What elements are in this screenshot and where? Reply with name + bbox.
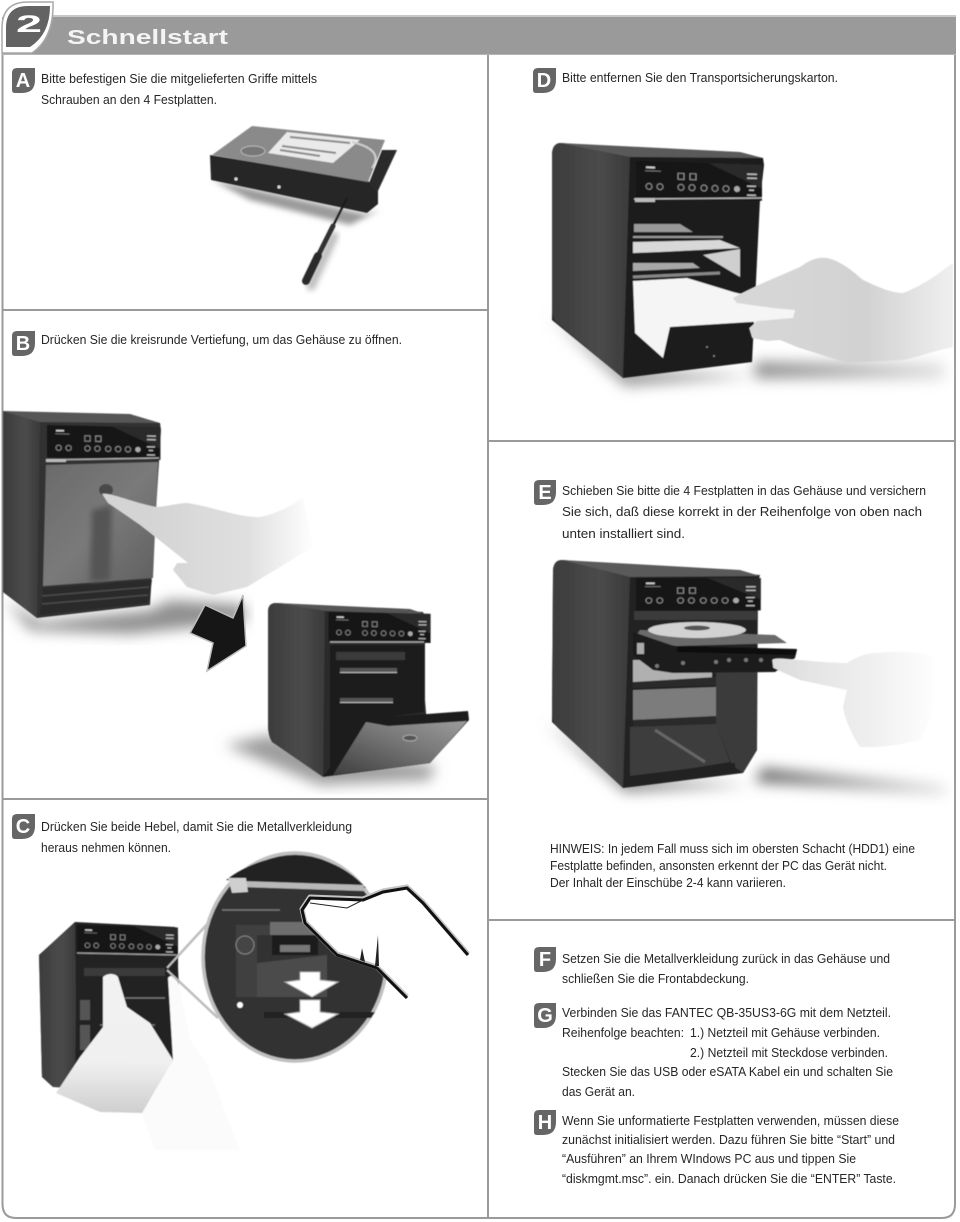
text H: zunächst initialisiert werden. Dazu führen Sie bitte “Start” und xyxy=(562,1132,895,1147)
text G xyxy=(562,1005,893,1099)
panel A: attach handles xyxy=(12,68,397,286)
text E: Schieben Sie bitte die 4 Festplatten in das Gehäuse und versichern xyxy=(562,483,926,498)
arrow xyxy=(190,595,246,671)
section number tab xyxy=(2,2,53,53)
text G: 1.) Netzteil mit Gehäuse verbinden. xyxy=(690,1025,880,1040)
text F: schließen Sie die Frontabdeckung. xyxy=(562,971,749,986)
badge D: D xyxy=(537,70,551,92)
title: Schnellstart xyxy=(67,27,228,49)
panel H xyxy=(534,1110,899,1186)
text G: Reihenfolge beachten: xyxy=(562,1025,684,1040)
enclosure with hand xyxy=(39,922,240,1150)
text E: unten installiert sind. xyxy=(562,526,685,541)
enclosure with drive xyxy=(552,560,797,788)
badge F: F xyxy=(539,949,551,971)
text G: das Gerät an. xyxy=(562,1084,635,1099)
badge D xyxy=(533,68,556,93)
badge A xyxy=(12,68,35,93)
badge G: G xyxy=(537,1005,553,1027)
closed enclosure xyxy=(3,411,245,634)
panel C: remove metal cover xyxy=(12,814,468,1150)
note: HINWEIS: HINWEIS: In jedem Fall muss sich im obersten Schacht (HDD1) eine xyxy=(550,841,915,856)
text C xyxy=(41,819,352,855)
shadow E xyxy=(545,722,945,795)
text G: 2.) Netzteil mit Steckdose verbinden. xyxy=(690,1045,888,1060)
magnified detail xyxy=(167,853,387,1061)
text C: heraus nehmen können. xyxy=(41,840,171,855)
section number tab: 2 xyxy=(16,11,42,38)
text A xyxy=(41,71,317,107)
text E: Sie sich, daß diese korrekt in der Reihenfolge von oben nach xyxy=(562,504,922,519)
text C: Drücken Sie beide Hebel, damit Sie die Metallverkleidung xyxy=(41,819,352,834)
text A: Schrauben an den 4 Festplatten. xyxy=(41,92,217,107)
badge G xyxy=(534,1003,556,1028)
badge C: C xyxy=(16,816,30,838)
panel B: open the case xyxy=(3,331,469,785)
text E xyxy=(562,483,926,541)
hand outline xyxy=(302,887,468,1100)
opened enclosure xyxy=(225,603,469,785)
hard drive with screwdriver xyxy=(210,126,397,286)
badge C xyxy=(12,814,35,839)
text H: “Ausführen” an Ihrem WIndows PC aus und tippen Sie xyxy=(562,1151,856,1166)
text F: Setzen Sie die Metallverkleidung zurück in das Gehäuse und xyxy=(562,951,890,966)
hand pulling xyxy=(733,258,953,363)
text G: Verbinden Sie das FANTEC QB-35US3-6G mit dem Netzteil. xyxy=(562,1005,891,1020)
text B: Drücken Sie die kreisrunde Vertiefung, um das Gehäuse zu öffnen. xyxy=(41,332,402,347)
note: HINWEIS: Festplatte befinden, ansonsten erkennt der PC das Gerät nicht. xyxy=(550,858,887,873)
enclosure with cardboard xyxy=(552,143,797,378)
note: HINWEIS xyxy=(550,841,915,890)
badge H xyxy=(534,1110,556,1135)
badge E xyxy=(534,480,556,505)
text H xyxy=(562,1113,899,1186)
panel D: remove transport cardboard xyxy=(533,68,953,386)
text G: Stecken Sie das USB oder eSATA Kabel ein und schalten Sie xyxy=(562,1064,893,1079)
note: HINWEIS: Der Inhalt der Einschübe 2-4 kann variieren. xyxy=(550,875,786,890)
text A: Bitte befestigen Sie die mitgelieferten Griffe mittels xyxy=(41,71,317,86)
down arrows xyxy=(285,972,338,1028)
text H: Wenn Sie unformatierte Festplatten verwenden, müssen diese xyxy=(562,1113,899,1128)
hand pointing xyxy=(772,652,940,747)
badge A: A xyxy=(16,70,30,92)
text F xyxy=(562,951,890,986)
text D: Bitte entfernen Sie den Transportsicherungskarton. xyxy=(562,70,838,85)
badge B xyxy=(12,331,35,356)
badge B: B xyxy=(16,333,30,355)
badge E: E xyxy=(538,482,552,504)
panel F xyxy=(534,947,890,986)
hard drive sliding out xyxy=(633,622,797,673)
hand pressing xyxy=(102,494,313,595)
text H: “diskmgmt.msc”. ein. Danach drücken Sie die “ENTER” Taste. xyxy=(562,1171,896,1186)
header band xyxy=(2,2,956,55)
badge H: H xyxy=(538,1112,552,1134)
panel E: insert drives xyxy=(534,480,945,795)
shadow D xyxy=(548,315,945,386)
panel G xyxy=(534,1003,893,1099)
badge F xyxy=(534,947,556,972)
